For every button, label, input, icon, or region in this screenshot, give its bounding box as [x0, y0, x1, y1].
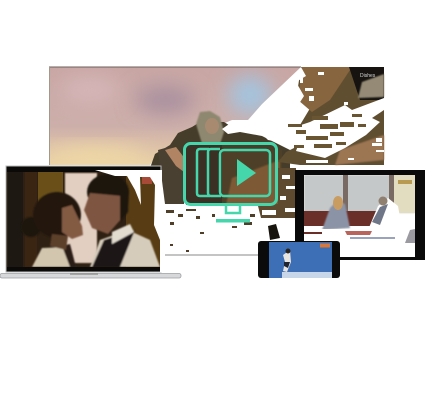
laptop screen: couple [7, 172, 160, 267]
rock with seated man [150, 111, 290, 205]
monitor outline [184, 144, 276, 204]
front video frame [220, 150, 270, 196]
phone [258, 241, 340, 278]
middle video layer [208, 149, 221, 196]
woman [21, 192, 83, 267]
tablet [295, 170, 425, 260]
sky [45, 67, 304, 166]
white smear on the laptop screen [95, 170, 162, 272]
laptop bezel [6, 166, 161, 272]
snow [250, 67, 306, 142]
laptop [0, 166, 181, 278]
laptop base [0, 274, 181, 278]
monitor stand [226, 205, 240, 213]
icon: teal monitor with play button [184, 144, 276, 222]
phone screen: tennis player [269, 242, 332, 278]
man [84, 174, 160, 267]
right cliff, broken-up rock [250, 67, 384, 165]
tablet logo [398, 180, 412, 184]
snow specks on rock [300, 72, 384, 163]
rock specks on snow [288, 114, 366, 148]
watermark label: Dishes [360, 73, 376, 79]
panel: landscape hero image [45, 67, 384, 255]
back video layer [197, 149, 210, 196]
monitor base [216, 219, 250, 222]
tablet screen: winter window scene [304, 175, 415, 243]
lower rock remnants [165, 168, 296, 255]
infographic: video on multiple devices [0, 66, 425, 278]
phone body [258, 241, 340, 278]
play triangle [237, 159, 256, 186]
tablet body [295, 170, 425, 260]
